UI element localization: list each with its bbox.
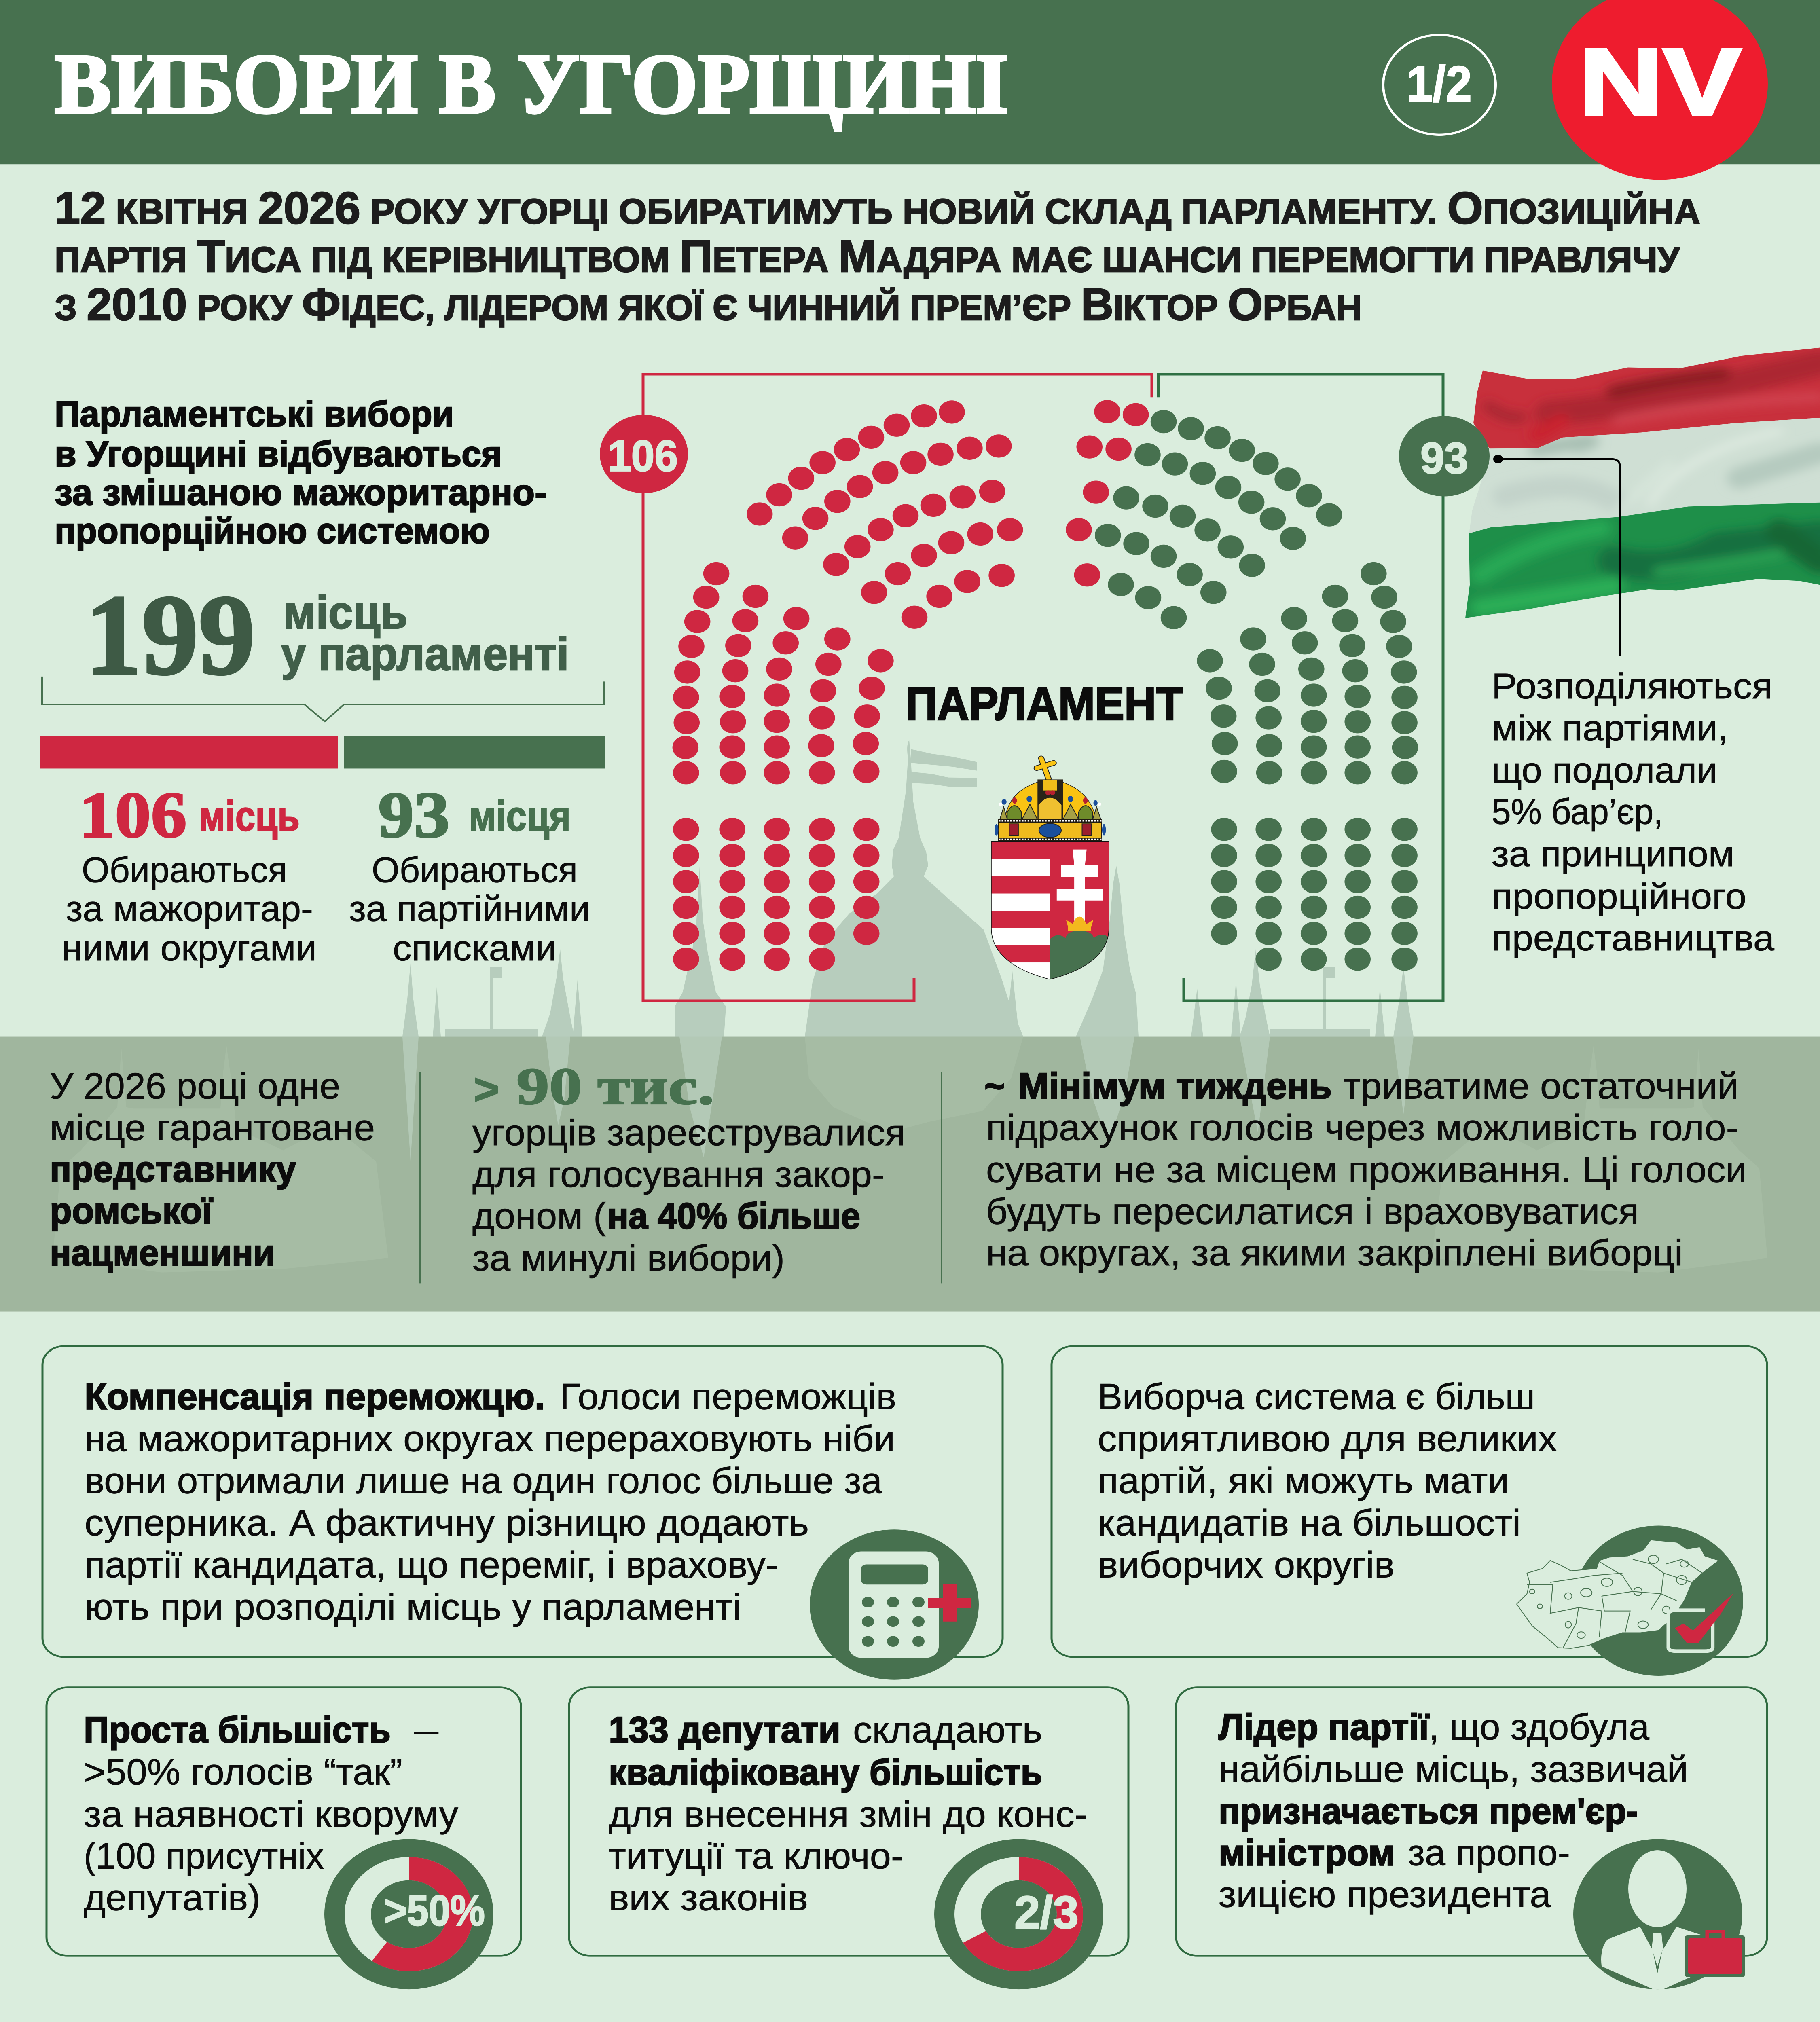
text: Проста більшість	[84, 1709, 391, 1750]
stat: 199 seats: 199	[85, 571, 255, 699]
text: final count: сувати не за місцем проживання. Ці голоси	[986, 1149, 1747, 1190]
panel: qualified majority	[569, 1687, 1128, 1989]
heading: mixed system: за змішаною мажоритарно-	[55, 472, 547, 513]
chart: two thirds donut: 2/3	[1014, 1887, 1079, 1938]
stat: 106 seats: Обираються	[82, 850, 287, 890]
skyline silhouette above the band	[402, 740, 1414, 1037]
text: proportional seats: 5% бар’єр,	[1492, 791, 1663, 832]
stat: 93 seats	[349, 779, 590, 969]
text: міністром	[1219, 1832, 1395, 1873]
text: voters abroad: угорців зареєструвалися	[472, 1112, 906, 1153]
text	[85, 1376, 896, 1627]
text: виборчих округів	[1098, 1544, 1395, 1585]
stat: 93 seats: Обираються	[372, 850, 578, 890]
badge: 93: 93	[1420, 434, 1468, 482]
text: proportional seats: Розподіляються	[1492, 666, 1773, 706]
stat: 93 seats: місця	[469, 793, 571, 840]
stat: 199 seats	[85, 571, 569, 699]
heading: mixed system: пропорційною системою	[55, 511, 490, 551]
text: final count: будуть пересилатися і враховуватися	[986, 1191, 1639, 1232]
intro text: ПАРТІЯ ТИСА ПІД КЕРІВНИЦТВОМ ПЕТЕРА МАДЯРА МАЄ ШАНСИ ПЕРЕМОГТИ ПРАВЛЯЧУ	[55, 231, 1680, 281]
text: proportional seats: представництва	[1492, 918, 1774, 958]
text: зицією президента	[1219, 1874, 1551, 1915]
stat: 93 seats: списками	[393, 928, 557, 969]
text: Roma seat: У 2026 році одне	[50, 1066, 340, 1106]
text: voters abroad: для голосування закор-	[472, 1154, 885, 1195]
chart: more than 50% donut	[324, 1839, 493, 1989]
title: ВИБОРИ В УГОРЩИНІ	[55, 37, 1009, 131]
text: voters abroad: доном (	[472, 1195, 606, 1237]
text: за пропо-	[1408, 1832, 1570, 1873]
chart: more than 50% donut: >50%	[384, 1887, 485, 1935]
text: 133 депутати	[609, 1709, 840, 1750]
text: proportional seats	[1492, 666, 1774, 958]
text: voters abroad: 90	[516, 1057, 582, 1115]
text: voters abroad: тис.	[597, 1057, 714, 1115]
panel: facts band	[0, 1037, 1820, 1312]
text: voters abroad: за минулі вибори)	[472, 1237, 785, 1279]
shield	[991, 842, 1109, 981]
intro text: 12 КВІТНЯ 2026 РОКУ УГОРЦІ ОБИРАТИМУТЬ НОВИЙ СКЛАД ПАРЛАМЕНТУ. ОПОЗИЦІЙНА	[55, 183, 1700, 233]
page counter 1/2	[1383, 35, 1496, 135]
panel: large parties	[1052, 1346, 1767, 1676]
stat: 199 seats: місць	[283, 586, 408, 639]
text: депутатів)	[84, 1877, 260, 1918]
text: кандидатів на більшості	[1098, 1502, 1521, 1543]
panel: simple majority	[47, 1687, 521, 1989]
text: final count: Мінімум тиждень	[1018, 1066, 1332, 1106]
heading: mixed system: Парламентські вибори	[55, 394, 454, 434]
text: final count: ~	[984, 1066, 1005, 1106]
NV logo	[1552, 0, 1768, 180]
seats: 106 red	[673, 400, 1149, 971]
text: на мажоритарних округах перераховують ніби	[85, 1418, 895, 1459]
split bar	[40, 736, 605, 768]
text: proportional seats: за принципом	[1492, 834, 1734, 874]
panel: party leader	[1176, 1687, 1767, 1991]
text: для внесення змін до конс-	[609, 1794, 1087, 1835]
text: proportional seats: що подолали	[1492, 750, 1717, 791]
text: final count: на округах, за якими закріплені виборці	[986, 1232, 1683, 1273]
text: складають	[853, 1709, 1042, 1750]
badge: 106	[600, 415, 688, 493]
text: —	[414, 1709, 438, 1750]
text: Roma seat: представнику	[50, 1149, 296, 1190]
panel: electoral system summary	[40, 394, 605, 969]
header band	[0, 0, 1820, 180]
text	[609, 1709, 1087, 1918]
icon: coat of arms of Hungary	[991, 758, 1109, 981]
text: proportional seats: між партіями,	[1492, 708, 1728, 749]
text: вих законів	[609, 1877, 808, 1918]
text: Roma seat: ромської	[50, 1190, 213, 1231]
crown	[995, 758, 1106, 842]
panel: winner compensation	[42, 1346, 1003, 1680]
text: Лідер партії	[1219, 1707, 1430, 1747]
text	[1219, 1707, 1688, 1915]
text: final count: підрахунок голосів через можливість голо-	[986, 1107, 1739, 1148]
text: final count: триватиме остаточний	[1343, 1066, 1739, 1106]
parliament frame: green	[1158, 374, 1443, 1001]
stat: 106 seats: ними округами	[62, 928, 317, 969]
intro text: З 2010 РОКУ ФІДЕС, ЛІДЕРОМ ЯКОЇ Є ЧИННИЙ ПРЕМ’ЄР ВІКТОР ОРБАН	[55, 279, 1362, 330]
leader line	[1493, 455, 1620, 656]
text: вони отримали лише на один голос більше за	[85, 1460, 882, 1501]
parliament frame: red	[643, 374, 1152, 1001]
text: Виборча система є більш	[1098, 1376, 1535, 1417]
text	[1098, 1376, 1557, 1585]
icon: map and ballot check	[1517, 1525, 1743, 1676]
stat: 106 seats: за мажоритар-	[66, 888, 313, 929]
stat: 93 seats: за партійними	[349, 888, 590, 929]
text: партії кандидата, що переміг, і врахову-	[85, 1544, 778, 1585]
text: суперника. А фактичну різницю додають	[85, 1502, 809, 1543]
text: сприятливою для великих	[1098, 1418, 1557, 1459]
heading: parliament: ПАРЛАМЕНТ	[906, 677, 1183, 730]
chart: two thirds donut	[934, 1839, 1103, 1989]
text: final count	[984, 1066, 1747, 1273]
text: призначається прем'єр-	[1219, 1791, 1638, 1832]
seats: 93 green	[1095, 410, 1418, 971]
text	[84, 1709, 458, 1918]
text: proportional seats: пропорційного	[1492, 876, 1746, 917]
text: ють при розподілі місць у парламенті	[85, 1586, 741, 1627]
flag of Hungary	[1456, 341, 1820, 622]
text: партій, які можуть мати	[1098, 1460, 1509, 1501]
intro text	[55, 183, 1700, 330]
text: Roma seat: місце гарантоване	[50, 1107, 375, 1148]
text: Голоси переможців	[560, 1376, 896, 1417]
badge: 93	[1399, 416, 1490, 497]
text: кваліфіковану більшість	[609, 1752, 1042, 1793]
NV logo: NV	[1579, 29, 1742, 135]
bracket	[42, 677, 604, 721]
text: Компенсація переможцю.	[85, 1376, 545, 1417]
text: (100 присутніх	[84, 1836, 324, 1876]
text: Roma seat: нацменшини	[50, 1232, 275, 1273]
text: >50% голосів “так”	[84, 1751, 402, 1792]
badge: 106: 106	[608, 431, 678, 480]
icon: calculator	[810, 1529, 979, 1680]
stat: 199 seats: у парламенті	[281, 628, 569, 680]
heading: mixed system: в Угорщині відбуваються	[55, 434, 502, 474]
stat: 106 seats	[62, 779, 317, 969]
text: voters abroad: >	[474, 1065, 499, 1113]
text: за наявності кворуму	[84, 1794, 458, 1835]
text: , що здобула	[1429, 1707, 1649, 1747]
heading: mixed system	[55, 394, 547, 551]
stat: 106 seats: місць	[199, 793, 300, 840]
text: voters abroad	[472, 1057, 906, 1279]
text: найбільше місць, зазвичай	[1219, 1749, 1688, 1790]
text: voters abroad: на 40% більше	[607, 1195, 860, 1237]
page counter 1/2: 1/2	[1407, 55, 1472, 112]
icon: politician with briefcase	[1573, 1839, 1745, 1991]
band skyline reflection	[402, 1037, 1414, 1160]
stat: 106 seats: 106	[79, 779, 187, 851]
text: титуції та ключо-	[609, 1836, 904, 1876]
text: Roma seat	[50, 1066, 375, 1273]
stat: 93 seats: 93	[378, 779, 450, 851]
